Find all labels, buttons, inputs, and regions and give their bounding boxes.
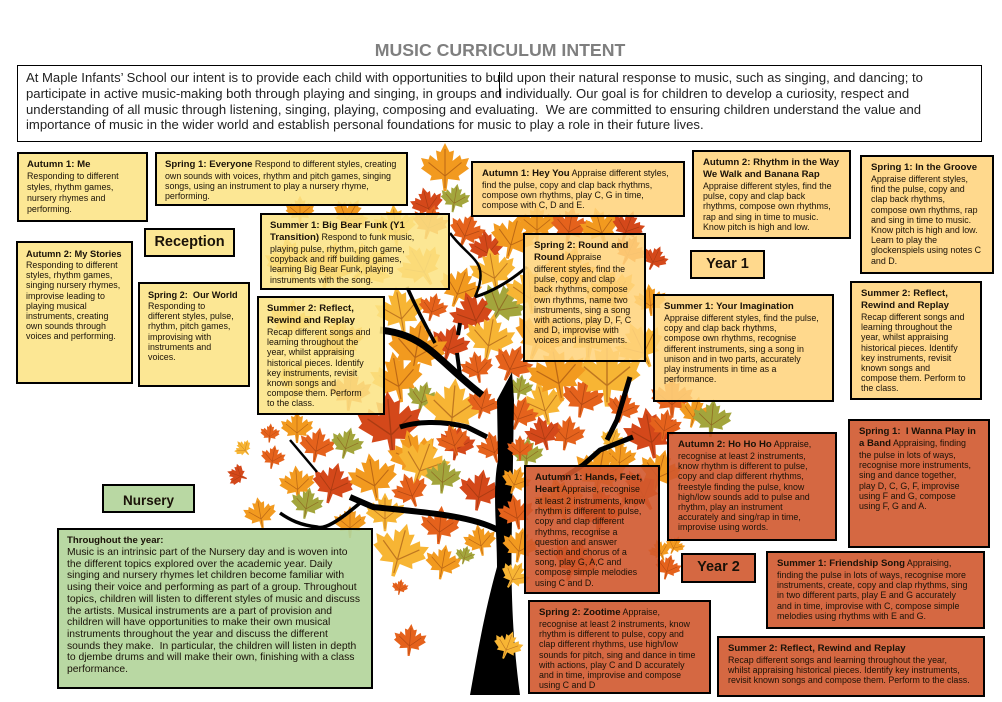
- panel: Nursery, throughout the year: singing and nursery rhymes let children become familiar with: [67, 570, 344, 581]
- panel: Year 2, Autumn 2: [667, 432, 837, 541]
- panel: Reception, Spring 2: Responding to: [148, 301, 205, 311]
- panel: Reception, Autumn 1: Autumn 1: Me: [27, 159, 90, 170]
- panel: Year 1, Spring 1: find the pulse, copy and: [871, 184, 965, 194]
- panel: Year 1, Spring 1: compose own rhythms, rap: [871, 205, 978, 215]
- panel: Nursery, throughout the year: instruments throughout the year and discuss the different: [67, 629, 328, 640]
- panel: Year 2, Summer 1: instruments, create, copy and clap rhythms, sing: [777, 580, 967, 590]
- panel: Reception, Summer 1: Transition) Respond to funk music,: [270, 232, 414, 243]
- panel: Reception, Spring 1: Spring 1: Everyone Respond to different styles, creating: [165, 159, 396, 170]
- panel: Year 2, Autumn 1: Heart Appraise, recognise: [535, 484, 640, 495]
- panel: Reception, Spring 2: [138, 282, 250, 387]
- panel: Reception, Summer 1: Summer 1: Big Bear Funk (Y1: [270, 220, 405, 231]
- panel: Reception, Summer 2: Recap different songs and: [267, 327, 370, 337]
- panel: Reception, Autumn 1: Responding to different: [27, 171, 119, 181]
- panel: Year 1, Spring 1: Learn to play the: [871, 235, 937, 245]
- panel: Reception, Summer 2: Rewind and Replay: [267, 315, 355, 326]
- panel: Year 1, Spring 2: different styles, find the: [534, 264, 625, 274]
- panel: Year 2, Autumn 1: song, play G, A,C and: [535, 557, 621, 567]
- panel: Year 1, Autumn 2: pulse, copy and clap back: [703, 191, 805, 201]
- panel: Year 2, Spring 2: using C and D: [539, 680, 595, 690]
- panel: Year 1, Spring 2: with actions, play D, F, C: [534, 315, 631, 325]
- panel: Year 1, Autumn 2: [692, 150, 851, 239]
- panel: Reception, Autumn 1: performing.: [27, 204, 72, 214]
- panel: Reception, Spring 1: own sounds with voices, rhythm and pitch games, singing: [165, 171, 391, 181]
- panel: Year 2, Autumn 2: accurately and sing/rap in time,: [678, 512, 801, 522]
- panel: Reception, Summer 2: learning throughout the: [267, 337, 358, 347]
- panel: Year 1, Summer 1: [653, 294, 834, 402]
- panel: Year 1, Spring 2: [523, 233, 646, 362]
- title: MUSIC CURRICULUM INTENT: [375, 40, 625, 60]
- heading: Nursery: [102, 484, 195, 513]
- panel: Year 1, Summer 2: historical pieces. Identify: [861, 343, 958, 353]
- heading: Year 2: [681, 553, 756, 583]
- panel: Year 1, Summer 1: play instruments in time as a: [664, 364, 776, 374]
- panel: Year 2, Autumn 2: high/low sounds add to pulse and: [678, 492, 810, 502]
- panel: Year 1, Autumn 2: Know pitch is high and low.: [703, 222, 810, 232]
- panel: Year 2, Spring 2: and in time, improvise and compose: [539, 670, 681, 680]
- panel: Year 2, Summer 1: Summer 1: Friendship Song Appraising,: [777, 558, 951, 569]
- panel: Year 1, Spring 1: clap back rhythms,: [871, 194, 945, 204]
- panel: Year 1, Summer 2: known songs and: [861, 363, 930, 373]
- panel: Reception, Spring 1: performing.: [165, 191, 210, 201]
- panel: Year 2, Spring 1: using F, G and A.: [859, 501, 927, 511]
- panel: Reception, Summer 1: copyback and riff building games,: [270, 254, 402, 264]
- panel: Reception, Spring 2: voices.: [148, 352, 176, 362]
- panel: Year 1, Autumn 2: Autumn 2: Rhythm in the Way: [703, 157, 839, 168]
- panel: Reception, Autumn 2: [16, 241, 133, 384]
- panel: Year 1, Spring 1: [860, 155, 994, 274]
- panel: Year 2, Autumn 1: copy and clap different: [535, 516, 624, 526]
- panel: Year 2, Autumn 1: rhythms, recognise a: [535, 527, 617, 537]
- panel: Year 2, Summer 2: revisit known songs and compose them. Perform to the class.: [728, 675, 970, 685]
- panel: Reception, Autumn 2: own sounds through: [26, 321, 106, 331]
- panel: Reception, Autumn 2: voices and performing.: [26, 331, 116, 341]
- panel: Year 1, Summer 2: learning throughout the: [861, 322, 952, 332]
- heading: Reception: Reception: [154, 234, 225, 250]
- panel: Year 1, Spring 2: and D, improvise with: [534, 325, 619, 335]
- panel: Reception, Spring 1: songs, using an instrument to play a nursery rhyme,: [165, 181, 369, 191]
- panel: Year 2, Spring 1: recognise more instruments,: [859, 460, 971, 470]
- panel: Year 2, Spring 2: [528, 600, 711, 694]
- panel: Year 1, Summer 2: year, whilst appraising: [861, 332, 948, 342]
- panel: Year 1, Spring 1: Know pitch is high and low.: [871, 225, 978, 235]
- panel: Reception, Summer 1: [260, 213, 450, 290]
- autumn leaves canopy, back layer: [224, 143, 733, 657]
- panel: Year 1, Spring 1: glockenspiels using notes C: [871, 245, 981, 255]
- autumn leaves canopy, front layer: [433, 420, 540, 663]
- panel: Year 2, Autumn 2: recognise at least 2 instruments,: [678, 451, 806, 461]
- heading: Nursery: Nursery: [123, 493, 174, 508]
- panel: Year 1, Spring 1: Appraise different styles,: [871, 174, 968, 184]
- panel: Year 2, Autumn 1: rhythm is different to pulse,: [535, 506, 641, 516]
- panel: Nursery, throughout the year: [57, 528, 373, 689]
- panel: Year 2, Summer 2: whilst appraising historical pieces. Identify key instruments,: [728, 665, 960, 675]
- panel: Reception, Autumn 2: Responding to different: [26, 260, 118, 270]
- panel: Year 1, Summer 2: compose them. Perform to: [861, 373, 966, 383]
- panel: Nursery, throughout the year: to djembe drums and will make their own, finishing with a class: [67, 652, 354, 663]
- panel: Year 2, Spring 1: the pulse in lots of ways,: [859, 450, 956, 460]
- panel: Year 2, Autumn 1: [524, 465, 660, 594]
- heading: Reception: [144, 228, 235, 257]
- panel: Year 1, Spring 1: and D.: [871, 256, 897, 266]
- panel: Year 2, Autumn 2: know rhythm is different to pulse,: [678, 461, 808, 471]
- panel: Year 2, Autumn 2: improvise using words.: [678, 522, 768, 532]
- panel: Year 1, Summer 1: different instruments, sing a song in: [664, 344, 804, 354]
- panel: Reception, Spring 2: different styles, pulse,: [148, 311, 234, 321]
- text cursor mark: [499, 72, 500, 97]
- panel: Year 2, Summer 2: Recap different songs and learning throughout the year,: [728, 655, 947, 665]
- panel: Nursery, throughout the year: Throughout the year:: [67, 535, 163, 546]
- panel: Nursery, throughout the year: Music is an intrinsic part of the Nursery day and is woven into: [67, 547, 348, 558]
- intro text block: importance of music in the wider world and establish personal foundations for music to play a role in their future lives.: [26, 117, 704, 132]
- panel: Reception, Autumn 2: Autumn 2: My Stories: [26, 249, 122, 259]
- panel: Year 1, Autumn 1: [471, 161, 685, 217]
- panel: Reception, Spring 1: [155, 152, 408, 206]
- panel: Reception, Summer 2: year, whilst appraising: [267, 347, 354, 357]
- panel: Nursery, throughout the year: topics, children will listen to different styles of music and discuss: [67, 594, 360, 605]
- intro text block: At Maple Infants’ School our intent is to provide each child with opportunities to build upon their natural response to music, such as singing, and dancing; to: [26, 70, 923, 85]
- intro text block: [17, 65, 982, 142]
- panel: Reception, Spring 2: Spring 2: Our World: [148, 290, 238, 300]
- panel: Reception, Autumn 2: improvise leading to: [26, 291, 105, 301]
- panel: Year 2, Summer 2: Summer 2: Reflect, Rewind and Replay: [728, 643, 906, 654]
- panel: Year 2, Summer 1: finding the pulse in lots of ways, recognise more: [777, 570, 966, 580]
- panel: Reception, Summer 2: known songs and: [267, 378, 336, 388]
- panel: Year 1, Autumn 2: rhythms, compose own rhythms,: [703, 201, 831, 211]
- panel: Nursery, throughout the year: using their voice and performing as part of a group. Throughout: [67, 582, 357, 593]
- panel: Year 1, Summer 1: performance.: [664, 374, 716, 384]
- panel: Year 2, Spring 1: a Band Appraising, finding: [859, 438, 966, 449]
- panel: Year 1, Autumn 2: Appraise different styles, find the: [703, 181, 832, 191]
- panel: Year 2, Autumn 1: Autumn 1: Hands, Feet,: [535, 472, 642, 483]
- heading: Year 1: [690, 250, 765, 279]
- panel: Reception, Spring 2: instruments and: [148, 342, 211, 352]
- panel: Reception, Summer 2: historical pieces. Identify: [267, 358, 364, 368]
- panel: Year 1, Spring 2: pulse, copy and clap: [534, 274, 615, 284]
- panel: Reception, Summer 1: learning Big Bear Funk, playing: [270, 264, 393, 274]
- panel: Year 1, Spring 1: and sing in time to music.: [871, 215, 971, 225]
- panel: Year 2, Autumn 1: at least 2 instruments, know: [535, 496, 645, 506]
- panel: Year 1, Spring 2: own rhythms, name two: [534, 295, 628, 305]
- panel: Year 2, Spring 1: sing and dance together,: [859, 470, 956, 480]
- panel: Year 1, Summer 2: key instruments, revisit: [861, 353, 951, 363]
- panel: Year 1, Summer 2: [850, 281, 982, 400]
- panel: Year 1, Spring 2: instruments, sing a song: [534, 305, 630, 315]
- panel: Year 2, Summer 1: [766, 551, 985, 629]
- panel: Year 1, Spring 1: Spring 1: In the Groove: [871, 162, 977, 173]
- panel: Reception, Summer 2: [257, 296, 385, 415]
- heading: Year 2: Year 2: [697, 559, 740, 575]
- panel: Year 1, Spring 2: Spring 2: Round and: [534, 240, 628, 251]
- intro text block: understanding of all music through listening, singing, playing, composing and evaluating. We are committed to ensuring children understand the value and: [26, 102, 921, 117]
- panel: Year 1, Autumn 1: find the pulse, copy and clap back rhythms,: [482, 180, 652, 190]
- panel: Reception, Spring 2: rhythm, pitch games,: [148, 321, 230, 331]
- panel: Year 1, Autumn 1: Autumn 1: Hey You Appraise different styles,: [482, 168, 669, 179]
- panel: Nursery, throughout the year: the artists. Musical instruments are a part of provision and: [67, 606, 332, 617]
- panel: Nursery, throughout the year: performance.: [67, 664, 128, 675]
- panel: Reception, Autumn 2: styles, rhythm games,: [26, 270, 112, 280]
- panel: Reception, Summer 2: key instruments, revisit: [267, 368, 357, 378]
- panel: Year 2, Spring 2: Spring 2: Zootime Appraise,: [539, 607, 660, 618]
- panel: Nursery, throughout the year: the different topics explored over the academic year. Daily: [67, 559, 332, 570]
- panel: Year 2, Spring 2: clap different rhythms, use high/low: [539, 639, 678, 649]
- panel: Year 2, Autumn 2: Autumn 2: Ho Ho Ho Appraise,: [678, 439, 811, 450]
- panel: Year 2, Autumn 1: question and answer: [535, 537, 617, 547]
- panel: Reception, Autumn 2: instruments, creating: [26, 311, 108, 321]
- panel: Year 2, Spring 1: play D, C, G, F, improvise: [859, 481, 960, 491]
- panel: Reception, Summer 2: to the class.: [267, 398, 314, 408]
- panel: Year 2, Autumn 2: rhythm, play an instrument: [678, 502, 783, 512]
- panel: Year 1, Spring 2: Round Appraise: [534, 252, 601, 263]
- panel: Nursery, throughout the year: children will have opportunities to make their own musical: [67, 617, 330, 628]
- panel: Year 1, Summer 1: Appraise different styles, find the pulse,: [664, 313, 819, 323]
- panel: Year 2, Spring 2: rhythm is different to pulse, copy and: [539, 629, 684, 639]
- panel: Reception, Summer 2: compose them. Perform: [267, 388, 362, 398]
- panel: Year 2, Autumn 2: copy and clap different rhythms,: [678, 471, 804, 481]
- panel: Reception, Summer 1: playing pulse, rhythm, pitch game,: [270, 244, 405, 254]
- panel: Reception, Autumn 1: nursery rhymes and: [27, 193, 105, 203]
- intro text block: participate in active music-making both through playing and singing, in groups and individually. Our goal is for children to develop a curiosity, respect and: [26, 86, 909, 101]
- panel: Year 1, Autumn 1: compose with C, D and E.: [482, 200, 585, 210]
- panel: Year 1, Summer 1: Summer 1: Your Imagination: [664, 301, 794, 312]
- panel: Year 2, Autumn 1: using C and D.: [535, 578, 594, 588]
- panel: Year 2, Spring 2: sounds for pitch, sing and dance in time: [539, 650, 695, 660]
- panel: Year 2, Summer 2: [717, 636, 985, 697]
- panel: Reception, Autumn 2: singing nursery rhymes,: [26, 280, 120, 290]
- panel: Year 2, Autumn 1: compose simple melodies: [535, 567, 637, 577]
- panel: Year 1, Summer 2: Summer 2: Reflect,: [861, 288, 948, 299]
- panel: Year 1, Spring 2: voices and instruments.: [534, 335, 627, 345]
- panel: Year 1, Autumn 2: We Walk and Banana Rap: [703, 169, 820, 180]
- panel: Year 2, Summer 1: and in time, improvise with C, compose simple: [777, 601, 960, 611]
- panel: Year 1, Summer 1: unison and in two parts, accurately: [664, 354, 801, 364]
- tree trunk and branches: [280, 233, 633, 695]
- panel: Year 2, Autumn 1: section and chorus of a: [535, 547, 627, 557]
- panel: Year 1, Summer 2: the class.: [861, 383, 898, 393]
- panel: Reception, Summer 1: instruments with the song.: [270, 275, 373, 285]
- panel: Year 2, Spring 1: using F and G, compose: [859, 491, 956, 501]
- panel: Year 2, Spring 1: Spring 1: I Wanna Play in: [859, 426, 976, 437]
- heading: Year 1: Year 1: [706, 256, 749, 272]
- panel: Year 1, Summer 1: compose own rhythms, recognise: [664, 333, 796, 343]
- panel: Nursery, throughout the year: sounds they make. In particular, the children will listen in depth: [67, 641, 356, 652]
- panel: Reception, Autumn 2: playing musical: [26, 301, 87, 311]
- panel: Year 2, Spring 2: with actions, play C and D accurately: [539, 660, 685, 670]
- panel: Year 1, Autumn 1: compose own rhythms, play C, G in time,: [482, 190, 644, 200]
- panel: Reception, Spring 2: improvising with: [148, 332, 211, 342]
- panel: Year 1, Autumn 2: rap and sing in time to music.: [703, 212, 818, 222]
- panel: Reception, Autumn 1: [17, 152, 148, 222]
- panel: Year 2, Summer 1: in two different parts, play E and G accurately: [777, 590, 956, 600]
- panel: Year 1, Spring 2: back rhythms, compose: [534, 284, 628, 294]
- panel: Year 2, Spring 2: recognise at least 2 instruments, know: [539, 619, 690, 629]
- panel: Year 2, Autumn 2: freestyle finding the pulse, know: [678, 482, 804, 492]
- panel: Reception, Autumn 1: styles, rhythm games,: [27, 182, 113, 192]
- panel: Year 1, Summer 1: copy and clap back rhythms,: [664, 323, 776, 333]
- panel: Year 2, Spring 1: [848, 419, 990, 548]
- panel: Year 1, Summer 2: Rewind and Replay: [861, 300, 949, 311]
- panel: Reception, Summer 2: Summer 2: Reflect,: [267, 303, 354, 314]
- panel: Year 1, Summer 2: Recap different songs and: [861, 312, 964, 322]
- panel: Year 2, Summer 1: melodies using rhythms with E and G.: [777, 611, 926, 621]
